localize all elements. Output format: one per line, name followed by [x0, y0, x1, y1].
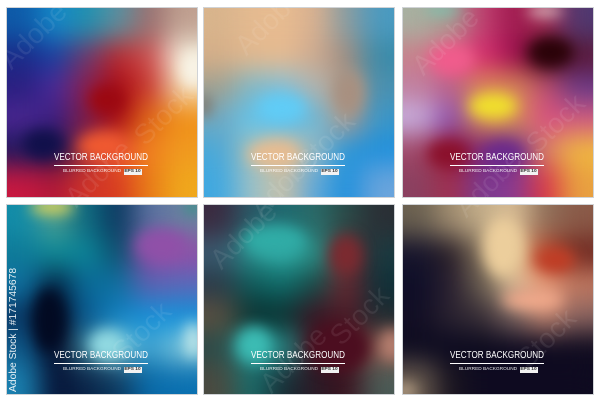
- heading: VECTOR BACKGROUND: [251, 350, 345, 361]
- badge: eps 10: EPS 10: [520, 168, 537, 174]
- watermark: adobe stock: Stock: [324, 279, 396, 351]
- heading: VECTOR BACKGROUND: [450, 350, 544, 361]
- blurred colour field: [7, 8, 197, 197]
- watermark: adobe stock: Adobe: [254, 320, 333, 399]
- panel: dark teal and maroon blurred background: [204, 205, 394, 394]
- watermark: adobe stock: Stock: [511, 302, 583, 374]
- caption: vector background: [450, 152, 544, 175]
- subheading: BLURRED BACKGROUND: [260, 168, 318, 174]
- watermark: adobe stock: Adobe: [449, 144, 528, 223]
- subheading: BLURRED BACKGROUND: [459, 366, 517, 372]
- blurred colour field: [204, 205, 394, 394]
- watermark: adobe stock: Adobe: [244, 144, 323, 223]
- side label: adobe stock id: Adobe Stock | #171745678: [8, 268, 19, 392]
- blurred colour field: [7, 205, 197, 394]
- heading: VECTOR BACKGROUND: [450, 152, 544, 163]
- badge: eps 10: EPS 10: [321, 168, 338, 174]
- caption: vector background: [251, 350, 345, 373]
- watermark: adobe stock: Stock: [128, 79, 200, 151]
- blurred colour field: [403, 8, 593, 197]
- watermark: adobe stock: Stock: [290, 105, 362, 177]
- panel: warm red orange purple blurred background: [7, 8, 197, 197]
- panel: pink yellow purple blurred background: [403, 8, 593, 197]
- subheading: BLURRED BACKGROUND: [260, 366, 318, 372]
- subheading: BLURRED BACKGROUND: [459, 168, 517, 174]
- panel: dark navy tan and peach blurred background: [403, 205, 593, 394]
- watermark: adobe stock: Stock: [520, 87, 592, 159]
- subheading: BLURRED BACKGROUND: [63, 366, 121, 372]
- badge: eps 10: EPS 10: [124, 366, 141, 372]
- panel: tan and sky blue blurred background: [204, 8, 394, 197]
- blurred colour field: [204, 8, 394, 197]
- caption: vector background: [251, 152, 345, 175]
- blurred colour field: [403, 205, 593, 394]
- watermark: adobe stock: Adobe: [406, 2, 485, 81]
- badge: eps 10: EPS 10: [520, 366, 537, 372]
- watermark: adobe stock: Stock: [106, 295, 178, 367]
- heading: VECTOR BACKGROUND: [54, 152, 148, 163]
- heading: VECTOR BACKGROUND: [251, 152, 345, 163]
- caption: vector background: [54, 350, 148, 373]
- heading: VECTOR BACKGROUND: [54, 350, 148, 361]
- subheading: BLURRED BACKGROUND: [63, 168, 121, 174]
- caption: vector background: [54, 152, 148, 175]
- panel: teal blue purple blurred background: [7, 205, 197, 394]
- caption: vector background: [450, 350, 544, 373]
- watermark: adobe stock: Adobe: [59, 134, 138, 213]
- badge: eps 10: EPS 10: [124, 168, 141, 174]
- badge: eps 10: EPS 10: [321, 366, 338, 372]
- watermark: adobe stock: Adobe: [204, 196, 283, 275]
